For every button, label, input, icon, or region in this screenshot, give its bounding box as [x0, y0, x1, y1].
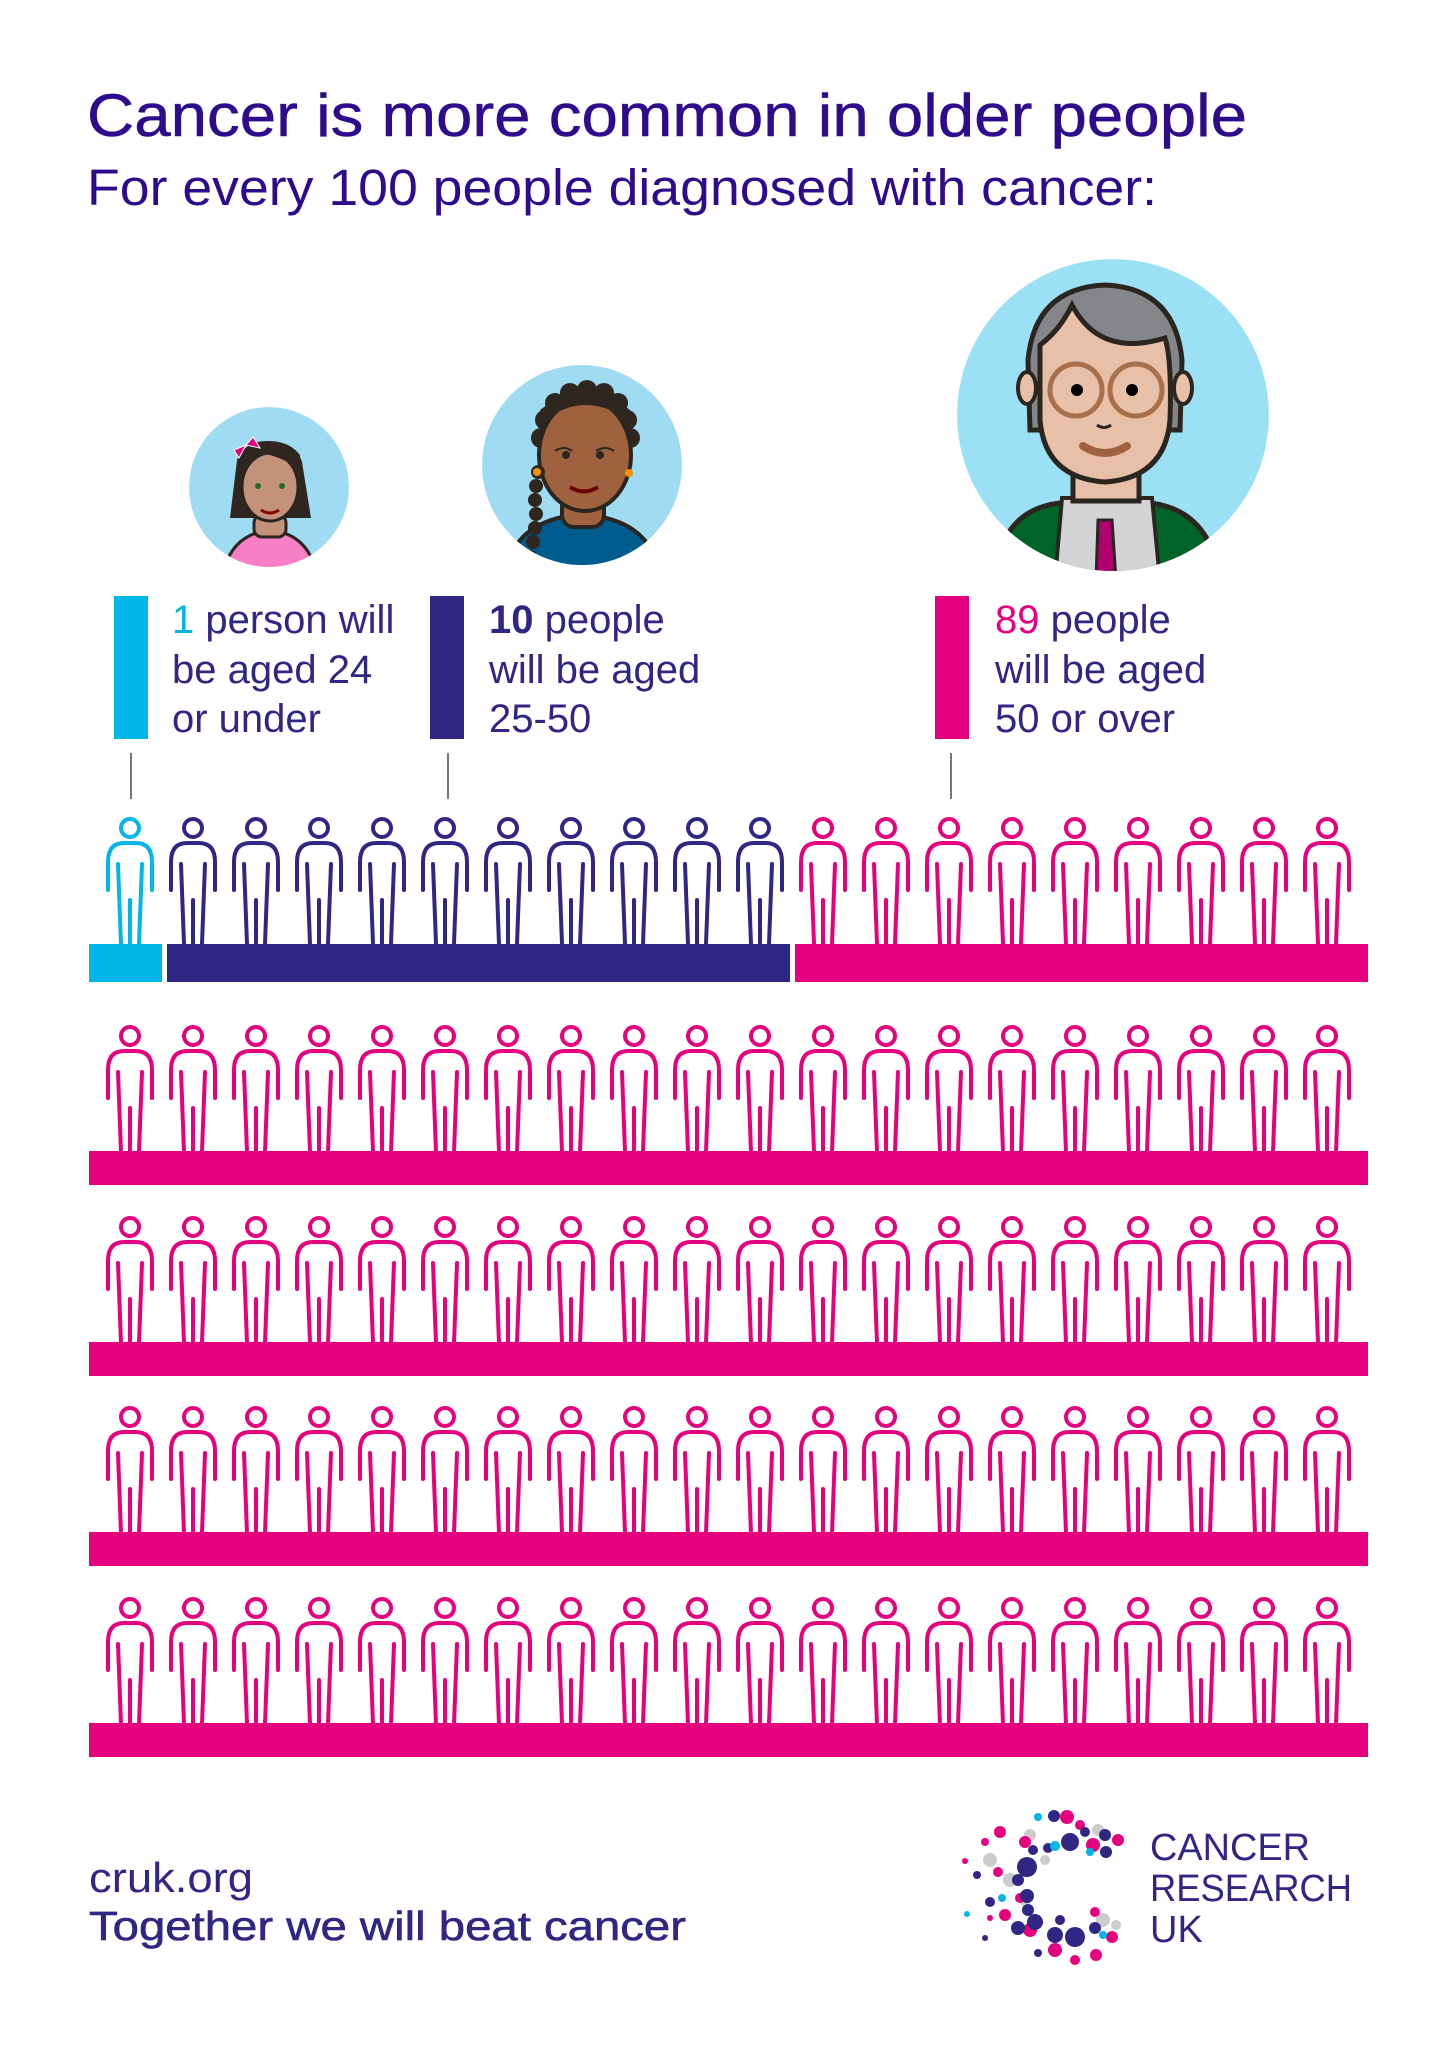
subtitle: For every 100 people diagnosed with cancer:	[87, 159, 1157, 216]
label: 50 or over: will be aged	[994, 648, 1206, 692]
avatar: girl	[189, 407, 349, 567]
footer: tagline: Together we will beat cancer	[89, 1903, 686, 1949]
logo wordmark: CANCER	[1150, 1827, 1310, 1869]
row 5	[89, 1599, 1368, 1757]
row 3	[89, 1218, 1368, 1376]
title: Cancer is more common in older people	[87, 82, 1247, 149]
footer: url: cruk.org	[89, 1854, 253, 1901]
label: 25-50: 25-50	[489, 697, 591, 741]
logo	[962, 1810, 1352, 1965]
avatar: woman	[482, 365, 682, 580]
avatar: older man	[957, 259, 1269, 580]
label: 24 or under: or under	[172, 697, 321, 741]
label: 24 or under	[114, 596, 394, 741]
logo wordmark: RESEARCH	[1150, 1868, 1352, 1910]
row 4	[89, 1408, 1368, 1566]
label: 25-50: will be aged	[488, 648, 700, 692]
label: 25-50	[430, 596, 700, 741]
label: 50 or over	[935, 596, 1206, 741]
label: 50 or over: 89 people	[995, 598, 1171, 642]
label: 50 or over: 50 or over	[995, 697, 1175, 741]
logo mark: dotted C	[962, 1810, 1124, 1965]
row 2	[89, 1027, 1368, 1185]
row 1	[89, 819, 1368, 982]
label: 24 or under: be aged 24	[172, 648, 372, 692]
pointer lines	[131, 753, 951, 799]
label: 24 or under: 1 person will	[172, 598, 394, 642]
label: 25-50: 10 people	[489, 598, 665, 642]
logo wordmark: UK	[1150, 1909, 1203, 1951]
